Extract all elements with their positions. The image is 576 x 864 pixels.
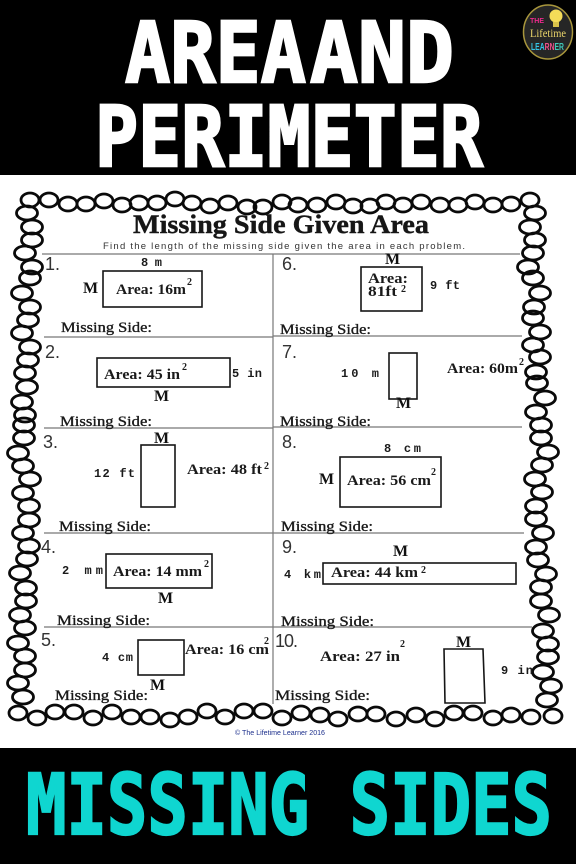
panel: problem 2 — [45, 342, 262, 430]
panel: problem 1 — [45, 254, 202, 336]
panel: problem 2: 2. — [45, 342, 60, 362]
title: area and perimeter: PERIMETER — [95, 88, 483, 186]
icon: The Lifetime Learner logo: LEARNER — [531, 42, 565, 53]
panel: problem 6: M — [385, 251, 400, 268]
panel: problem 5: 4 cm — [102, 651, 133, 665]
panel: problem 2: 5 in — [232, 367, 262, 381]
panel: problem 9: 9. — [282, 537, 297, 557]
panel: problem 3: Area: 48 ft — [187, 462, 262, 478]
panel: problem 3: M — [154, 430, 169, 447]
panel: problem 8: Area: 56 cm — [347, 473, 431, 489]
panel: problem 6: Missing Side: — [280, 322, 371, 338]
panel: problem 2: Missing Side: — [60, 414, 152, 430]
panel: problem 5: 2 — [264, 636, 269, 647]
panel: problem 9: 4 km — [284, 568, 321, 582]
panel: problem 1: Area: 16m — [116, 282, 186, 298]
heading: worksheet title: Missing Side Given Area — [133, 210, 429, 239]
panel: problem 7: 2 — [519, 357, 524, 368]
panel: problem 1: 8 m — [141, 256, 162, 270]
panel: problem 5: Missing Side: — [55, 688, 148, 704]
panel: problem 3 — [43, 430, 269, 535]
panel: problem 10: Missing Side: — [275, 688, 370, 704]
panel: problem 1: Missing Side: — [61, 320, 152, 336]
icon: The Lifetime Learner logo — [524, 5, 572, 59]
panel: problem 7: Missing Side: — [280, 414, 371, 430]
panel: problem 10: M — [456, 634, 471, 651]
panel: problem 9 — [281, 537, 516, 630]
panel: problem 5: 5. — [41, 630, 56, 650]
panel: problem 7: M — [396, 395, 411, 412]
icon: The Lifetime Learner logo: Lifetime — [530, 26, 566, 40]
title: area and perimeter — [95, 4, 483, 186]
panel: problem 2: Area: 45 in — [104, 367, 180, 383]
title: area and perimeter: AREA — [125, 4, 306, 102]
panel: problem 6: 2 — [401, 284, 406, 295]
panel: problem 9: 2 — [421, 565, 426, 576]
panel: problem 10 — [275, 631, 533, 704]
icon: The Lifetime Learner logo: THE — [530, 18, 544, 25]
panel: problem 5 — [41, 630, 269, 704]
title: area and perimeter: AND — [310, 4, 454, 102]
grid lines — [42, 254, 532, 704]
panel: worksheet border of circles — [8, 192, 562, 727]
panel: problem 10: 2 — [400, 639, 405, 650]
panel: problem 3: 3. — [43, 432, 58, 452]
panel: problem 8: 8 cm — [384, 442, 421, 456]
panel: problem 8: 2 — [431, 467, 436, 478]
panel: problem 7: Area: 60m — [447, 361, 518, 377]
panel: problem 8: 8. — [282, 432, 297, 452]
panel: top title band — [0, 0, 576, 186]
panel: problem 10: 9 in — [501, 664, 533, 678]
panel: problem 6: 9 ft — [430, 279, 460, 293]
panel: problem 3: 12 ft — [94, 467, 135, 481]
panel: problem 4: 4. — [41, 537, 56, 557]
panel: problem 9: M — [393, 543, 408, 560]
panel: problem 4: Area: 14 mm — [113, 564, 202, 580]
panel: problem 6: Area: — [368, 271, 408, 287]
panel: problem 6: 81ft — [368, 284, 397, 300]
panel: problem 4: Missing Side: — [57, 613, 150, 629]
panel: problem 9: Area: 44 km — [331, 565, 418, 581]
panel: problem 4: 2 mm — [62, 564, 103, 578]
panel: problem 1: 1. — [45, 254, 60, 274]
panel: problem 6 — [280, 251, 460, 338]
panel: problem 4: M — [158, 590, 173, 607]
panel: problem 6: 6. — [282, 254, 297, 274]
panel: problem 2: M — [154, 388, 169, 405]
panel: problem 2: 2 — [182, 362, 187, 373]
panel: problem 9: Missing Side: — [281, 614, 374, 630]
panel: problem 4 — [41, 537, 212, 629]
panel: problem 5: Area: 16 cm — [185, 642, 269, 658]
panel: problem 7 — [280, 342, 524, 430]
panel: problem 8: M — [319, 471, 334, 488]
panel: problem 7: 7. — [282, 342, 297, 362]
panel: problem 3: Missing Side: — [59, 519, 151, 535]
panel: bottom band — [0, 748, 576, 864]
panel: problem 10: 10. — [275, 631, 298, 651]
panel: problem 5: M — [150, 677, 165, 694]
panel: problem 1: M — [83, 280, 98, 297]
panel: problem 10: Area: 27 in — [320, 649, 400, 665]
panel: problem 8: Missing Side: — [281, 519, 373, 535]
panel: problem 3: 2 — [264, 461, 269, 472]
panel: problem 4: 2 — [204, 559, 209, 570]
panel: problem 1: 2 — [187, 277, 192, 288]
panel: problem 7: 10 m — [341, 367, 379, 381]
panel: problem 8 — [281, 432, 441, 535]
text block: copyright: © The Lifetime Learner 2016 — [235, 729, 325, 737]
text block: worksheet instructions: Find the length of the missing side given the area in each problem. — [103, 241, 465, 252]
